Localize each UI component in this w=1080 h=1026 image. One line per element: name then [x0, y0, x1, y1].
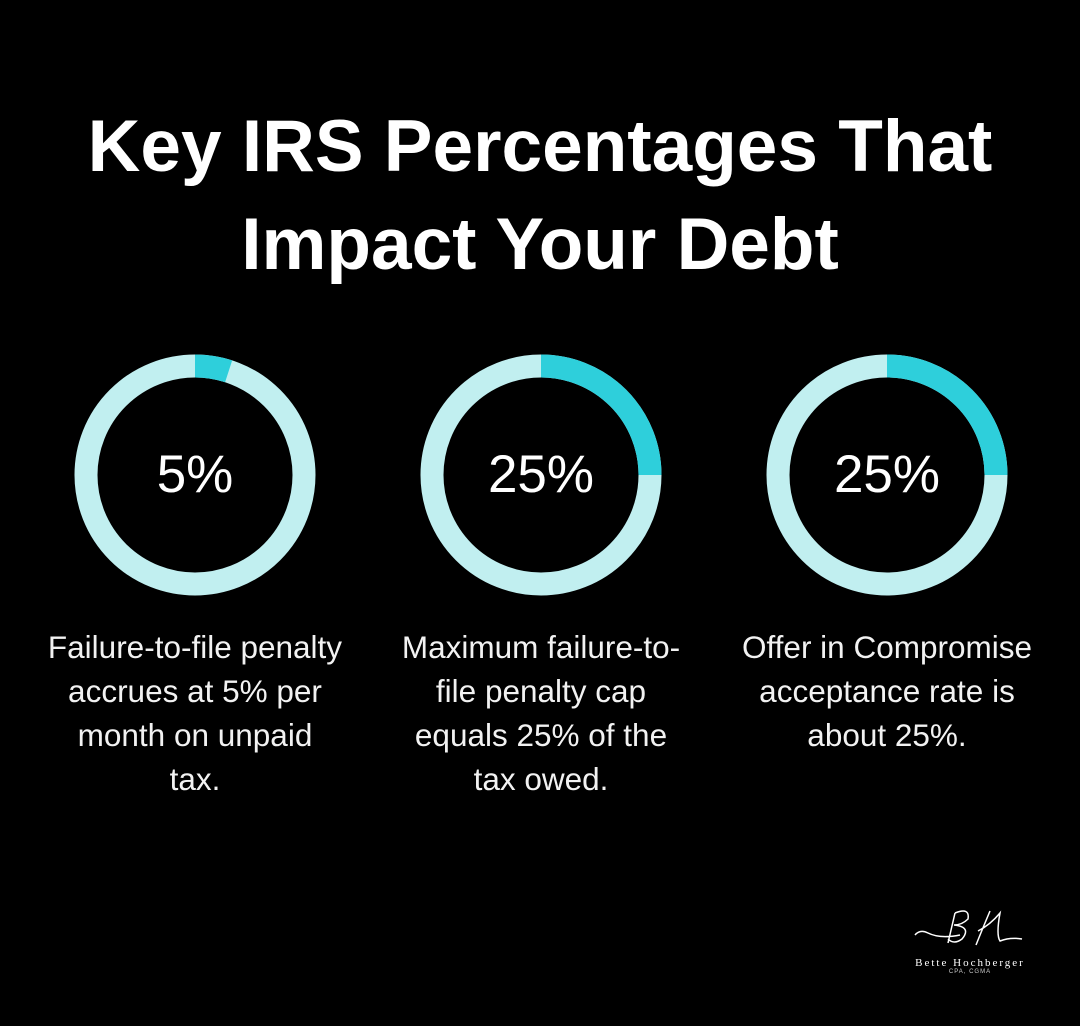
logo: Bette Hochberger [915, 957, 1025, 969]
number: 25%: 25% [488, 445, 594, 504]
text: offer in compromise [742, 629, 1032, 753]
text: offer in compromise: about 25%. [807, 717, 967, 753]
title [88, 106, 992, 285]
donut: 25% OIC [766, 354, 1008, 596]
text: maximum cap: file penalty cap [436, 673, 646, 709]
text: offer in compromise: acceptance rate is [759, 673, 1015, 709]
text: maximum cap: tax owed. [474, 761, 608, 797]
title: Impact Your Debt [241, 204, 839, 285]
text: offer in compromise: Offer in Compromise [742, 629, 1032, 665]
logo: CPA, CGMA [949, 969, 991, 975]
text: maximum cap: equals 25% of the [415, 717, 667, 753]
title: Key IRS Percentages That [88, 106, 992, 187]
number: 25% OIC: 25% [834, 445, 940, 504]
text: failure-to-file: accrues at 5% per [68, 673, 322, 709]
donut: 25% [420, 354, 662, 596]
text: maximum cap: Maximum failure-to- [402, 629, 680, 665]
text: failure-to-file [48, 629, 342, 797]
text: failure-to-file: month on unpaid [78, 717, 312, 753]
text: failure-to-file: Failure-to-file penalty [48, 629, 342, 665]
logo [914, 910, 1025, 975]
text: failure-to-file: tax. [170, 761, 220, 797]
text: maximum cap [402, 629, 680, 797]
number: 5%: 5% [157, 445, 233, 504]
donut: 5% [74, 354, 316, 596]
